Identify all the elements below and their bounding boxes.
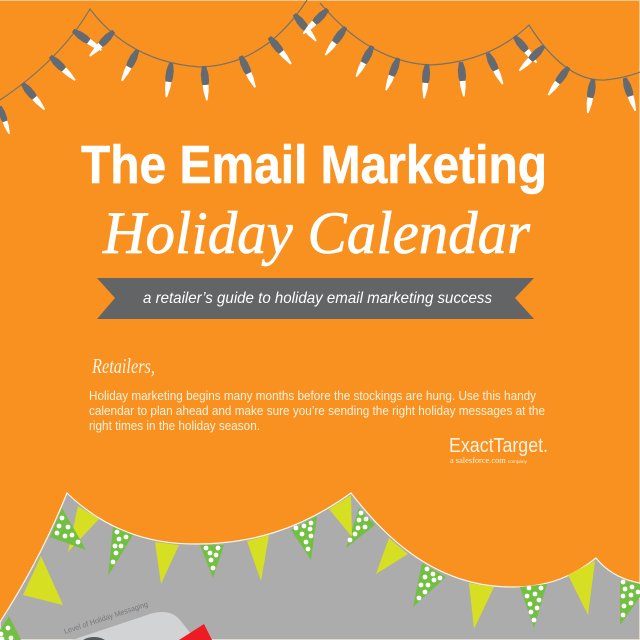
intro paragraph: right times in the holiday season. — [89, 419, 260, 433]
dark chart marker — [80, 637, 108, 640]
string of holiday lights — [0, 0, 640, 135]
ribbon banner — [97, 278, 534, 319]
bunting flags — [0, 495, 640, 640]
grey scalloped lower section — [0, 493, 640, 640]
intro paragraph — [89, 389, 545, 433]
title: The Email Marketing — [81, 135, 547, 195]
chart axis label: Level of Holiday Messaging — [63, 599, 149, 636]
intro paragraph: calendar to plan ahead and make sure you’re sending the right holiday messages at the — [89, 404, 545, 418]
intro paragraph: Holiday marketing begins many months before the stockings are hung. Use this handy — [89, 389, 537, 403]
greeting: Retailers, — [91, 354, 155, 378]
red chart shape — [179, 624, 212, 640]
ribbon tagline: a retailer’s guide to holiday email marketing success — [143, 290, 492, 307]
ExactTarget logo — [449, 435, 548, 465]
ExactTarget logo: a salesforce.com company — [450, 456, 528, 465]
ExactTarget logo: ExactTarget. — [449, 435, 548, 457]
chart panel — [72, 612, 196, 640]
script subtitle: Holiday Calendar — [102, 200, 531, 266]
